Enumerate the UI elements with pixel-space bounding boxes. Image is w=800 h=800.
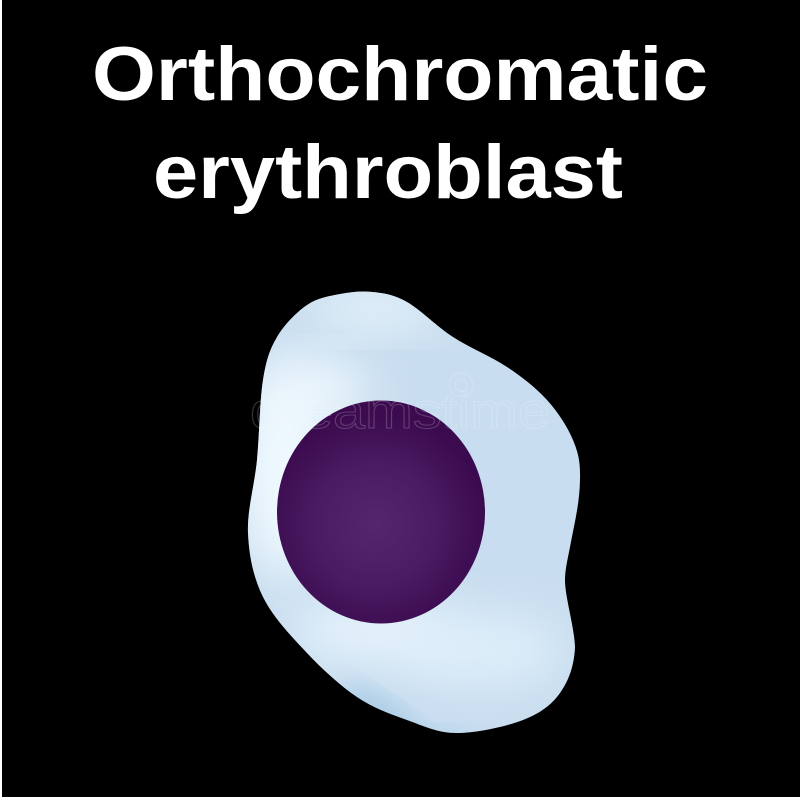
title: Orthochromatic xyxy=(92,32,708,117)
title xyxy=(92,32,708,215)
cell body xyxy=(248,292,580,733)
watermark: dreamstime xyxy=(250,383,550,439)
title: erythroblast xyxy=(153,130,623,215)
nucleus xyxy=(277,400,485,624)
